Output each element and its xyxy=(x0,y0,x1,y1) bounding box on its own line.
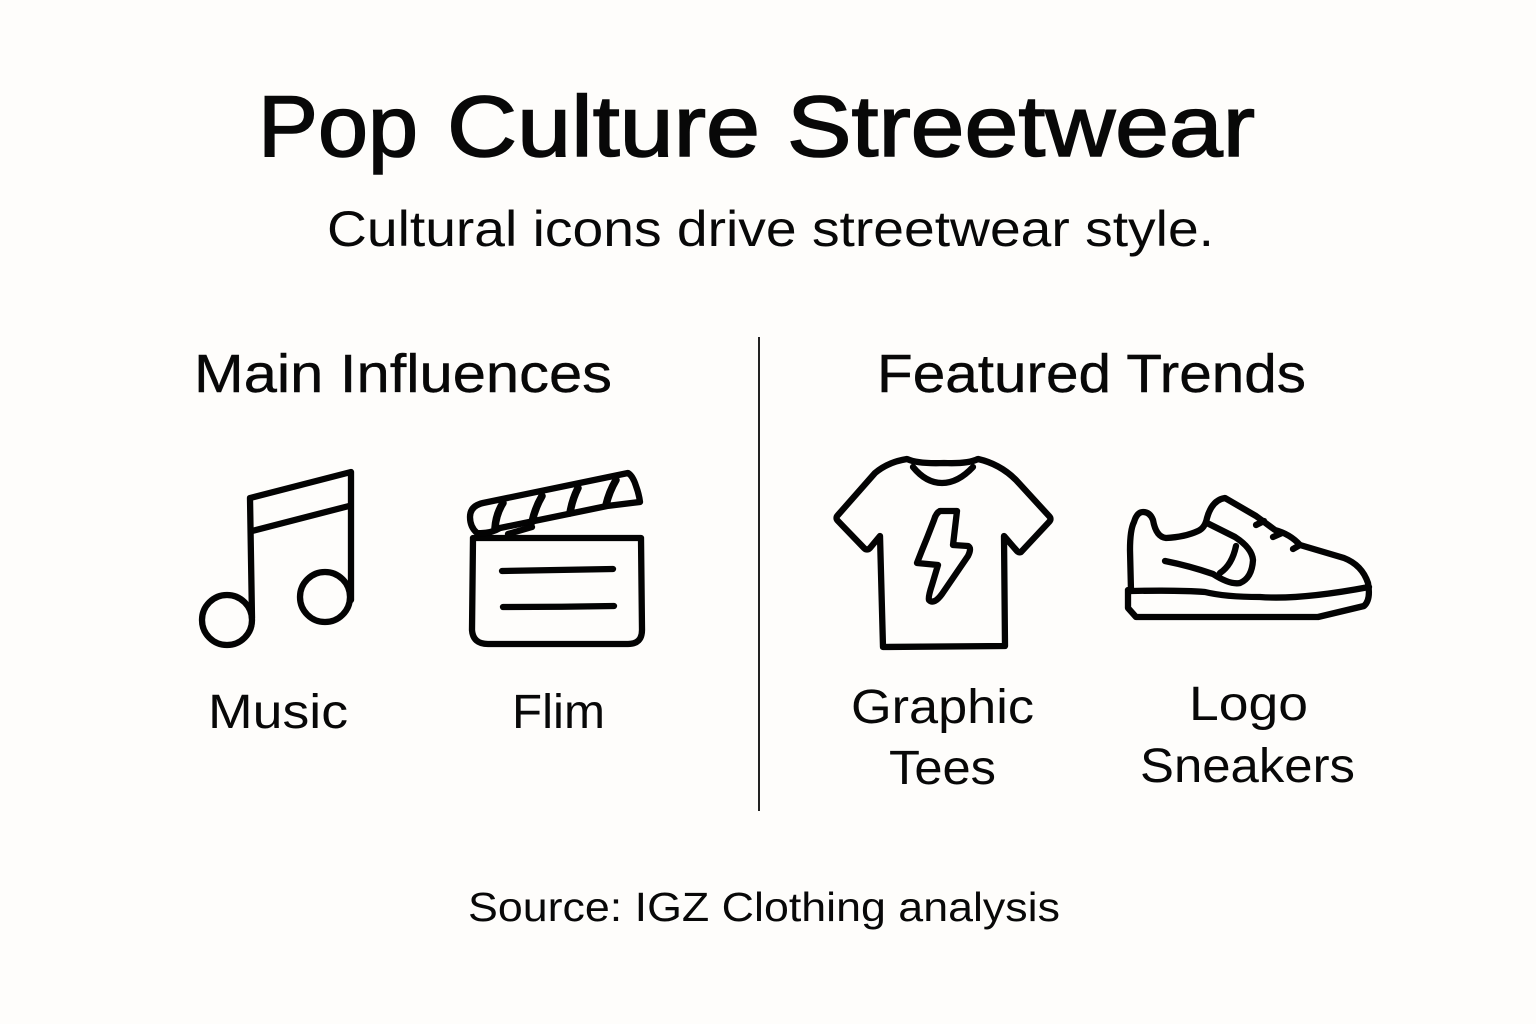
label: logo sneakers xyxy=(1140,678,1355,793)
panel: featured trends xyxy=(836,344,1369,795)
label: logo sneakers: Logo xyxy=(1189,678,1308,731)
divider xyxy=(758,337,760,811)
icon: graphic tee with lightning bolt xyxy=(836,459,1050,647)
subtitle: Cultural icons drive streetwear style. xyxy=(327,201,1214,257)
title: Pop xyxy=(258,79,418,175)
label: graphic tees xyxy=(851,681,1034,795)
panel: main influences xyxy=(194,344,642,739)
heading: main influences: Main Influences xyxy=(194,344,612,404)
label: logo sneakers: Sneakers xyxy=(1140,740,1355,793)
title xyxy=(258,79,1255,175)
title: Streetwear xyxy=(787,79,1255,175)
label: film: Flim xyxy=(512,686,605,739)
label: music: Music xyxy=(208,686,348,739)
icon: music notes xyxy=(202,472,351,645)
label: graphic tees: Tees xyxy=(889,742,996,795)
heading: featured trends: Featured Trends xyxy=(877,344,1306,404)
icon: logo sneaker xyxy=(1128,498,1369,617)
title: Culture xyxy=(447,79,760,175)
icon: film clapperboard xyxy=(470,473,642,644)
source note: Source: IGZ Clothing analysis xyxy=(468,884,1060,930)
label: graphic tees: Graphic xyxy=(851,681,1034,734)
